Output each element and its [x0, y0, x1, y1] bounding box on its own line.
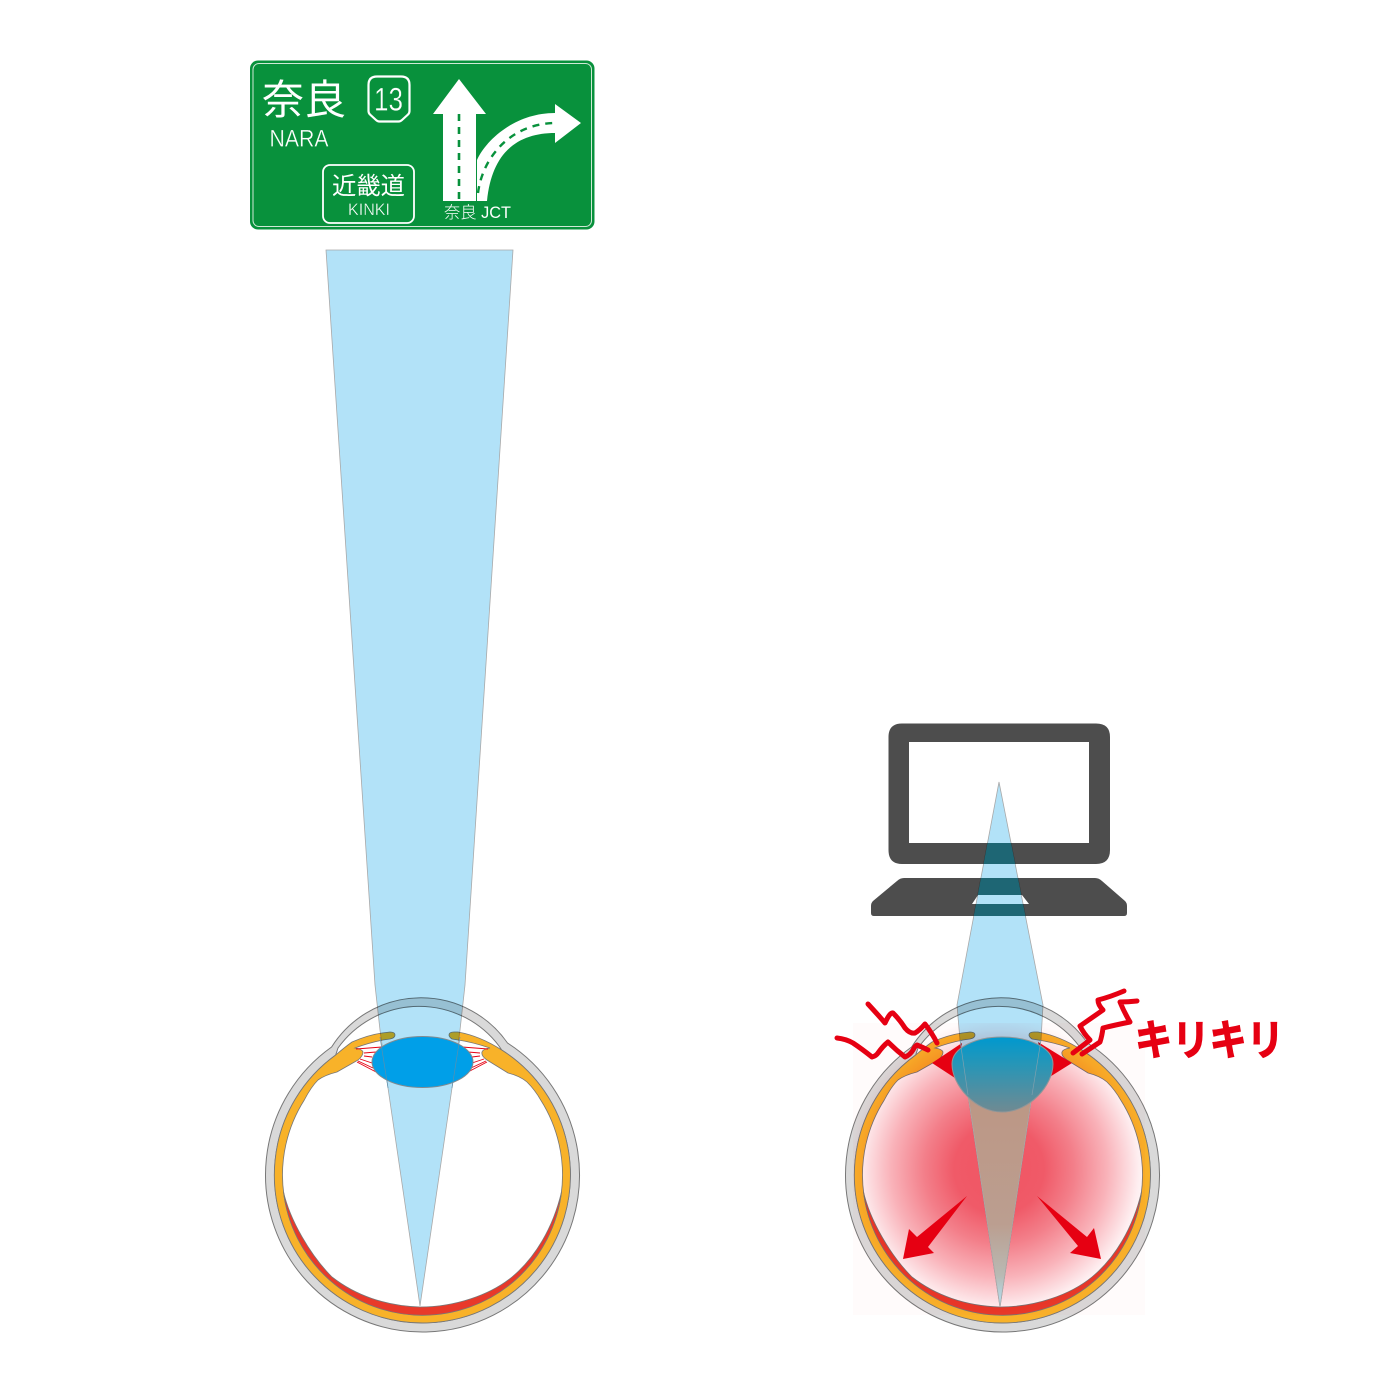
beam over laptop, dark overlap — [974, 843, 1026, 916]
lens, thin — [372, 1036, 473, 1088]
route 13 shield: 13 — [374, 82, 403, 118]
light beam from sign to retina — [326, 250, 513, 1306]
choroid and ciliary body — [274, 1032, 570, 1323]
place name: Nara: 奈良 — [262, 77, 346, 123]
beam over red glow — [968, 1095, 1032, 1307]
road sign — [250, 60, 594, 230]
romanised place name: NARA — [270, 126, 329, 152]
sclera — [266, 998, 580, 1332]
beam edges through lens — [380, 1037, 460, 1088]
zonule fibres — [356, 1047, 488, 1073]
lens, thickened — [952, 1037, 1053, 1112]
branching arrow — [477, 104, 581, 201]
Kinki expressway box: KINKI — [348, 200, 390, 219]
strain zigzags, left — [837, 1004, 937, 1057]
strain zigzags, right — [1073, 991, 1137, 1054]
strain label: キリキリ — [1135, 1017, 1284, 1064]
retina — [284, 1192, 562, 1315]
choroid and ciliary body — [854, 1032, 1150, 1323]
sign inner border — [253, 64, 592, 226]
red strain glow — [853, 1023, 1145, 1315]
tensed ciliary muscle, left — [932, 1043, 962, 1078]
pressure arrow, right — [1037, 1196, 1101, 1259]
left eye: relaxed, far focus — [266, 250, 580, 1332]
retina — [864, 1192, 1142, 1315]
tensed ciliary muscle, right — [1038, 1042, 1072, 1078]
laptop computer — [871, 724, 1127, 916]
light beam from laptop to retina — [957, 782, 1043, 1307]
pressure arrow, left — [903, 1196, 967, 1259]
sclera — [846, 998, 1160, 1332]
Kinki expressway box: 近畿道 — [332, 173, 405, 200]
right eye: strained, near focus — [846, 998, 1160, 1332]
beam edges through thick lens — [960, 1040, 1041, 1095]
Kinki expressway box — [323, 165, 414, 223]
route 13 shield — [368, 76, 410, 122]
straight-ahead arrow — [433, 79, 486, 201]
sign panel — [250, 60, 594, 230]
junction label: 奈良 JCT — [444, 203, 511, 222]
